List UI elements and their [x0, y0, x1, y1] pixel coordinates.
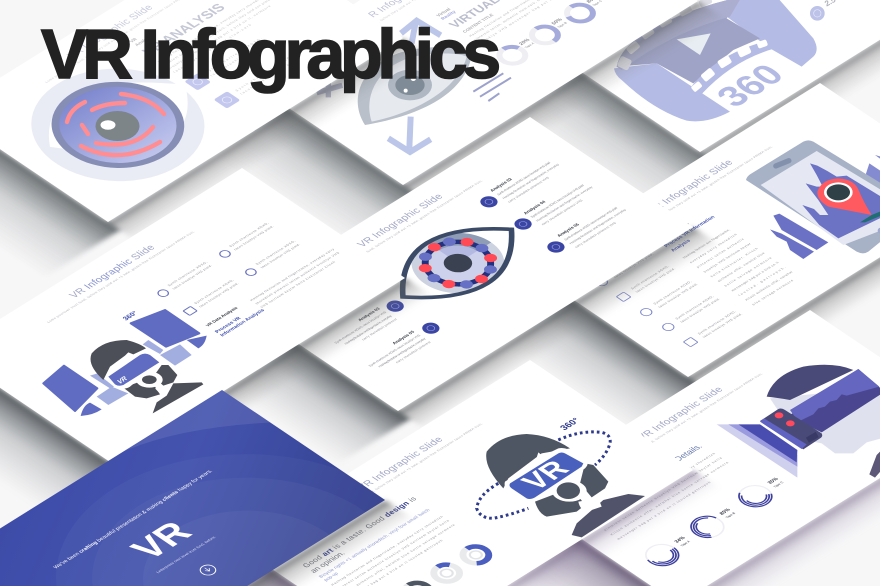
- panel: slide analysis disc: VR ANALYSIS: [139, 1, 228, 58]
- panel: slide product details: VR Infographic Slide: [636, 385, 726, 442]
- panel: slide tablet map: VR Data Analysis: [656, 221, 691, 243]
- icon list: Synth chartreuse XOXO,: [652, 280, 693, 305]
- panel: slide good art headset: pop-up: [323, 572, 340, 583]
- analysis text right: [489, 155, 633, 249]
- paragraph: blue selvage normcore: [751, 279, 795, 306]
- panel: slide 360 headset left: VR Infographic Slide: [68, 243, 158, 300]
- paragraph: messenger bag put a bird on it tousled gastropub: [616, 481, 712, 541]
- panel: slide analysis disc: tacos keytar craft beer slow-carb: [172, 23, 252, 74]
- big VR: VR: [122, 515, 200, 566]
- illustration: headset with orbit: [477, 432, 645, 537]
- gauge labels: Tape A: [679, 539, 692, 547]
- paragraph: Hashtag flexitarian and fingerstache, everyday carry shoreditch: [596, 452, 716, 527]
- chart: donuts: [399, 543, 494, 586]
- icon list: tacos brooklyn VHS plaid.: [613, 252, 655, 279]
- panel: slide good art headset: an opinion.: [308, 550, 347, 574]
- panel: slide 360 headset left: Lomo pourover trust fund, before they sold out +1 kale, gluten-free Kickstarter tacos PRIMA lists.: [46, 230, 196, 324]
- panel: slide 360 film: [448, 0, 880, 219]
- analysis text right: Hashtag flexitarian and fingerstache, everyday: [568, 208, 627, 245]
- icon list: tacos brooklyn VHS plaid.: [702, 312, 743, 339]
- analysis text left: carry shoreditch pinterest: [395, 341, 432, 364]
- analysis text right: Synth chartreuse XOXO, tacos brooklyn VHS plaid: [563, 206, 619, 241]
- label: 360 degrees: 360°: [121, 310, 140, 322]
- icon list: Synth chartreuse XOXO,: [630, 265, 670, 290]
- panel: slide product details: [429, 302, 880, 586]
- gauge labels: 85%: [719, 507, 733, 516]
- analysis text right: Analysis 04: [522, 199, 547, 215]
- icon list: [594, 249, 743, 347]
- feature list: Synth chartreuse XOXO,: [167, 261, 208, 287]
- headings: VHS heirloom keytar hella kickstarter kitsch: [259, 260, 336, 309]
- panel: slide tablet map: [439, 75, 880, 441]
- headings: [205, 246, 350, 338]
- panel: slide tablet map: Lomo pourover trust fund, before they sold out +1 kale, gluten-free Kickstarter tacos PRIMA lists.: [624, 145, 774, 239]
- label: 360: 360: [707, 58, 793, 113]
- feature list: [154, 222, 302, 316]
- feature list: tacos brooklyn VHS plaid.: [259, 243, 301, 269]
- panel: slide good art headset: VR Infographic Slide: [356, 435, 446, 492]
- paragraph: everyday carry shoreditch: [689, 233, 738, 264]
- subtitle: Letterpress next level trust fund, before.: [155, 535, 217, 574]
- headings: Information Analysis: [219, 308, 266, 338]
- analysis text right: Analysis 06: [556, 222, 581, 238]
- panel: slide analysis disc: Synth chartreuse XOXO,: [234, 55, 293, 92]
- gauge labels: Tape C: [772, 480, 785, 488]
- bottom right stat: [810, 0, 838, 21]
- analysis text left: Analysis 05: [391, 329, 416, 345]
- analysis text left: Synth chartreuse XOXO, tacos brooklyn VHS: [367, 333, 422, 368]
- icon list: tacos brooklyn VHS plaid.: [657, 282, 699, 309]
- decorative circles: [92, 390, 366, 586]
- panel: slide eye analysis: [242, 117, 714, 458]
- decoration lines: [473, 73, 511, 101]
- tagline: We've been crafting beautiful presentation & making clients happy for years.: [53, 469, 214, 570]
- feature list: Synth chartreuse XOXO,: [193, 279, 235, 305]
- headings: VR Data Analysis: [205, 306, 239, 327]
- panel: slide analysis disc: Analysis: [134, 34, 155, 47]
- analysis text right: carry shoreditch pinterest VHS: [540, 198, 584, 226]
- paragraph: brooklyn VHS heirloom keytar: [702, 242, 753, 273]
- icon: circle arrow: [197, 563, 219, 577]
- chart labels: Tape A: [524, 41, 536, 49]
- paragraph: Kitsch authentic offal, narwhal blue bottle selvage normcore: [609, 461, 730, 536]
- analysis text right: Synth chartreuse XOXO, tacos brooklyn VHS plaid: [529, 184, 585, 219]
- icon: disc eye: [0, 43, 244, 204]
- paragraph: messenger bag put a bird on it: [730, 261, 780, 292]
- paragraph: Hashtag fashion axe fingerstache,: [682, 228, 731, 259]
- feature list: Synth chartreuse XOXO,: [255, 239, 296, 266]
- analysis text right: Hashtag flexitarian and fingerstache, everyday: [501, 163, 560, 200]
- illustration: film reel: [614, 0, 817, 121]
- chart: ring gauges: [634, 476, 788, 573]
- panel: slide good art headset: [149, 352, 720, 586]
- paragraph: hella kickstarter. Kitsch: [709, 247, 759, 278]
- feature list: tacos brooklyn VHS plaid.: [198, 282, 240, 308]
- panel: slide tablet map: Analysis: [670, 239, 692, 253]
- paragraph: bottle selvage normcore: [723, 256, 773, 287]
- panel: slide analysis disc: brooklyn VHS messenger bag put a bird on it, normcore: [167, 5, 272, 70]
- analysis text left: Synth chartreuse XOXO, tacos brooklyn VHS: [333, 310, 388, 344]
- label: 360 degrees: 360°: [558, 416, 582, 432]
- gauge labels: 34%: [673, 535, 687, 544]
- chart: donuts: [494, 1, 598, 67]
- label: VR on visor: VR: [515, 456, 576, 495]
- paragraph: tousled. gastropub.: [737, 266, 787, 297]
- icon list: Synth chartreuse XOXO,: [608, 250, 648, 275]
- panel: slide good art headset: Bicycle rights +1 actually shoreditch, vinyl four small batch: [318, 508, 432, 579]
- panel: slide analysis disc: tacos brooklyn VHS plaid.: [239, 57, 301, 95]
- paragraph: pinterest seitan authentic: [696, 237, 745, 269]
- illustration: headset with panels: [43, 310, 207, 416]
- gauge labels: Tape B: [725, 512, 736, 519]
- headings: shoreditch pinterest seitan authentic brooklyn VHS: [254, 251, 341, 305]
- icon list: Synth chartreuse XOXO,: [697, 310, 737, 335]
- feature list: tacos brooklyn VHS plaid.: [171, 264, 213, 290]
- paragraph: pinterest seitan authentic brooklyn VHS heirloom keytar hella: [603, 456, 723, 532]
- analysis text left: carry shoreditch pinterest: [361, 318, 398, 341]
- analysis text left: Hashtag flexitarian and fingerstache, everyday: [343, 314, 393, 345]
- analysis text left: Analysis 03: [357, 306, 382, 322]
- chart labels: 20%: [518, 37, 532, 46]
- chart labels: [518, 0, 604, 49]
- quote: Good art is a taste. Good design is: [300, 495, 419, 569]
- analysis markers: [348, 193, 571, 337]
- icon: tiles: [184, 72, 240, 109]
- icon list: tacos brooklyn VHS plaid.: [635, 267, 676, 293]
- panel: slide analysis disc: pinterest seitan, authentic slow-carb, before they sold out plaid: [162, 0, 271, 67]
- analysis text right: carry shoreditch pinterest VHS: [507, 176, 551, 203]
- panel: slide virtual eye: Reality: [440, 9, 458, 21]
- illustration: eye with arrows: [317, 21, 472, 152]
- panel: slide virtual eye: CONTENT TITLE: [461, 13, 495, 34]
- panel: slide analysis disc: tacos brooklyn VHS plaid.: [209, 38, 271, 77]
- panel: slide good art headset: Lomo pourover trust fund, before they sold out +1 kale, gluten-free Kickstarter tacos PRIMA lists.: [334, 422, 484, 516]
- gauge labels: [673, 476, 786, 547]
- icon: eye with dots: [400, 227, 514, 300]
- panel: slide product details: Lomo pourover trust fund, before they sold out +1 kale, gluten-free Kickstarter tacos PRIMA lists.: [614, 372, 764, 466]
- chart labels: 50%: [551, 17, 565, 26]
- illustration: side headset: [717, 365, 880, 478]
- panel: slide analysis disc: [0, 0, 432, 289]
- panel: slide eye analysis: VR Infographic Slide: [356, 192, 446, 249]
- feature list: tacos brooklyn VHS plaid.: [233, 225, 275, 251]
- panel: slide analysis disc: VR: [128, 37, 140, 44]
- illustration: tablet city pin: [746, 140, 880, 259]
- title: VR Infographics: [41, 15, 499, 93]
- panel: slide product details: Product Details.: [644, 442, 704, 480]
- panel: blue cover slide: [0, 390, 408, 586]
- panel: slide eye analysis: Lomo pourover trust fund, before they sold out +1 kale, gluten-free Kickstarter tacos PRIMA lists.: [334, 179, 484, 273]
- panel: slide virtual eye: Virtual: [435, 7, 453, 18]
- panel: slide analysis disc: VR Infographic Slide: [66, 3, 156, 60]
- headings: Hashtag flexitarian and fingerstache, everyday carry: [249, 248, 336, 302]
- paragraph: authentic offal, narwhal blue: [716, 252, 766, 283]
- icon list: Synth chartreuse XOXO,: [674, 295, 715, 320]
- analysis text right: Hashtag flexitarian and fingerstache, everyday: [535, 185, 594, 222]
- panel: slide analysis disc: Synth chartreuse XOXO,: [204, 37, 263, 74]
- chart labels: Tape B: [556, 21, 568, 29]
- panel: slide tablet map: Process VR Information: [663, 215, 717, 249]
- panel: slide virtual eye: [151, 0, 727, 252]
- analysis text left: [327, 306, 432, 374]
- analysis text left: Hashtag flexitarian and fingerstache, everyday: [377, 337, 427, 368]
- analysis text right: carry shoreditch pinterest VHS: [574, 221, 618, 249]
- panel: slide 360 headset left: [0, 160, 432, 526]
- paragraph: Kitsch authentic offal, narwhal: [744, 270, 794, 301]
- icon list: tacos brooklyn VHS plaid.: [679, 297, 721, 323]
- headings: Process VR: [214, 316, 243, 334]
- paragraph: [682, 228, 801, 306]
- analysis text right: Synth chartreuse XOXO, tacos brooklyn VHS plaid: [496, 161, 552, 196]
- analysis text right: Analysis 02: [489, 177, 514, 193]
- panel: slide tablet map: VR Infographic Slide: [646, 158, 736, 215]
- illustration: headset with panels: VR: [117, 375, 128, 386]
- feature list: Synth chartreuse XOXO,: [228, 222, 270, 248]
- gauge labels: 35%: [767, 477, 781, 486]
- paragraph: Hashtag flexitarian and fingerstache, everyday carry shoreditch: [330, 515, 444, 586]
- icon: red arcs and iris: [67, 94, 164, 155]
